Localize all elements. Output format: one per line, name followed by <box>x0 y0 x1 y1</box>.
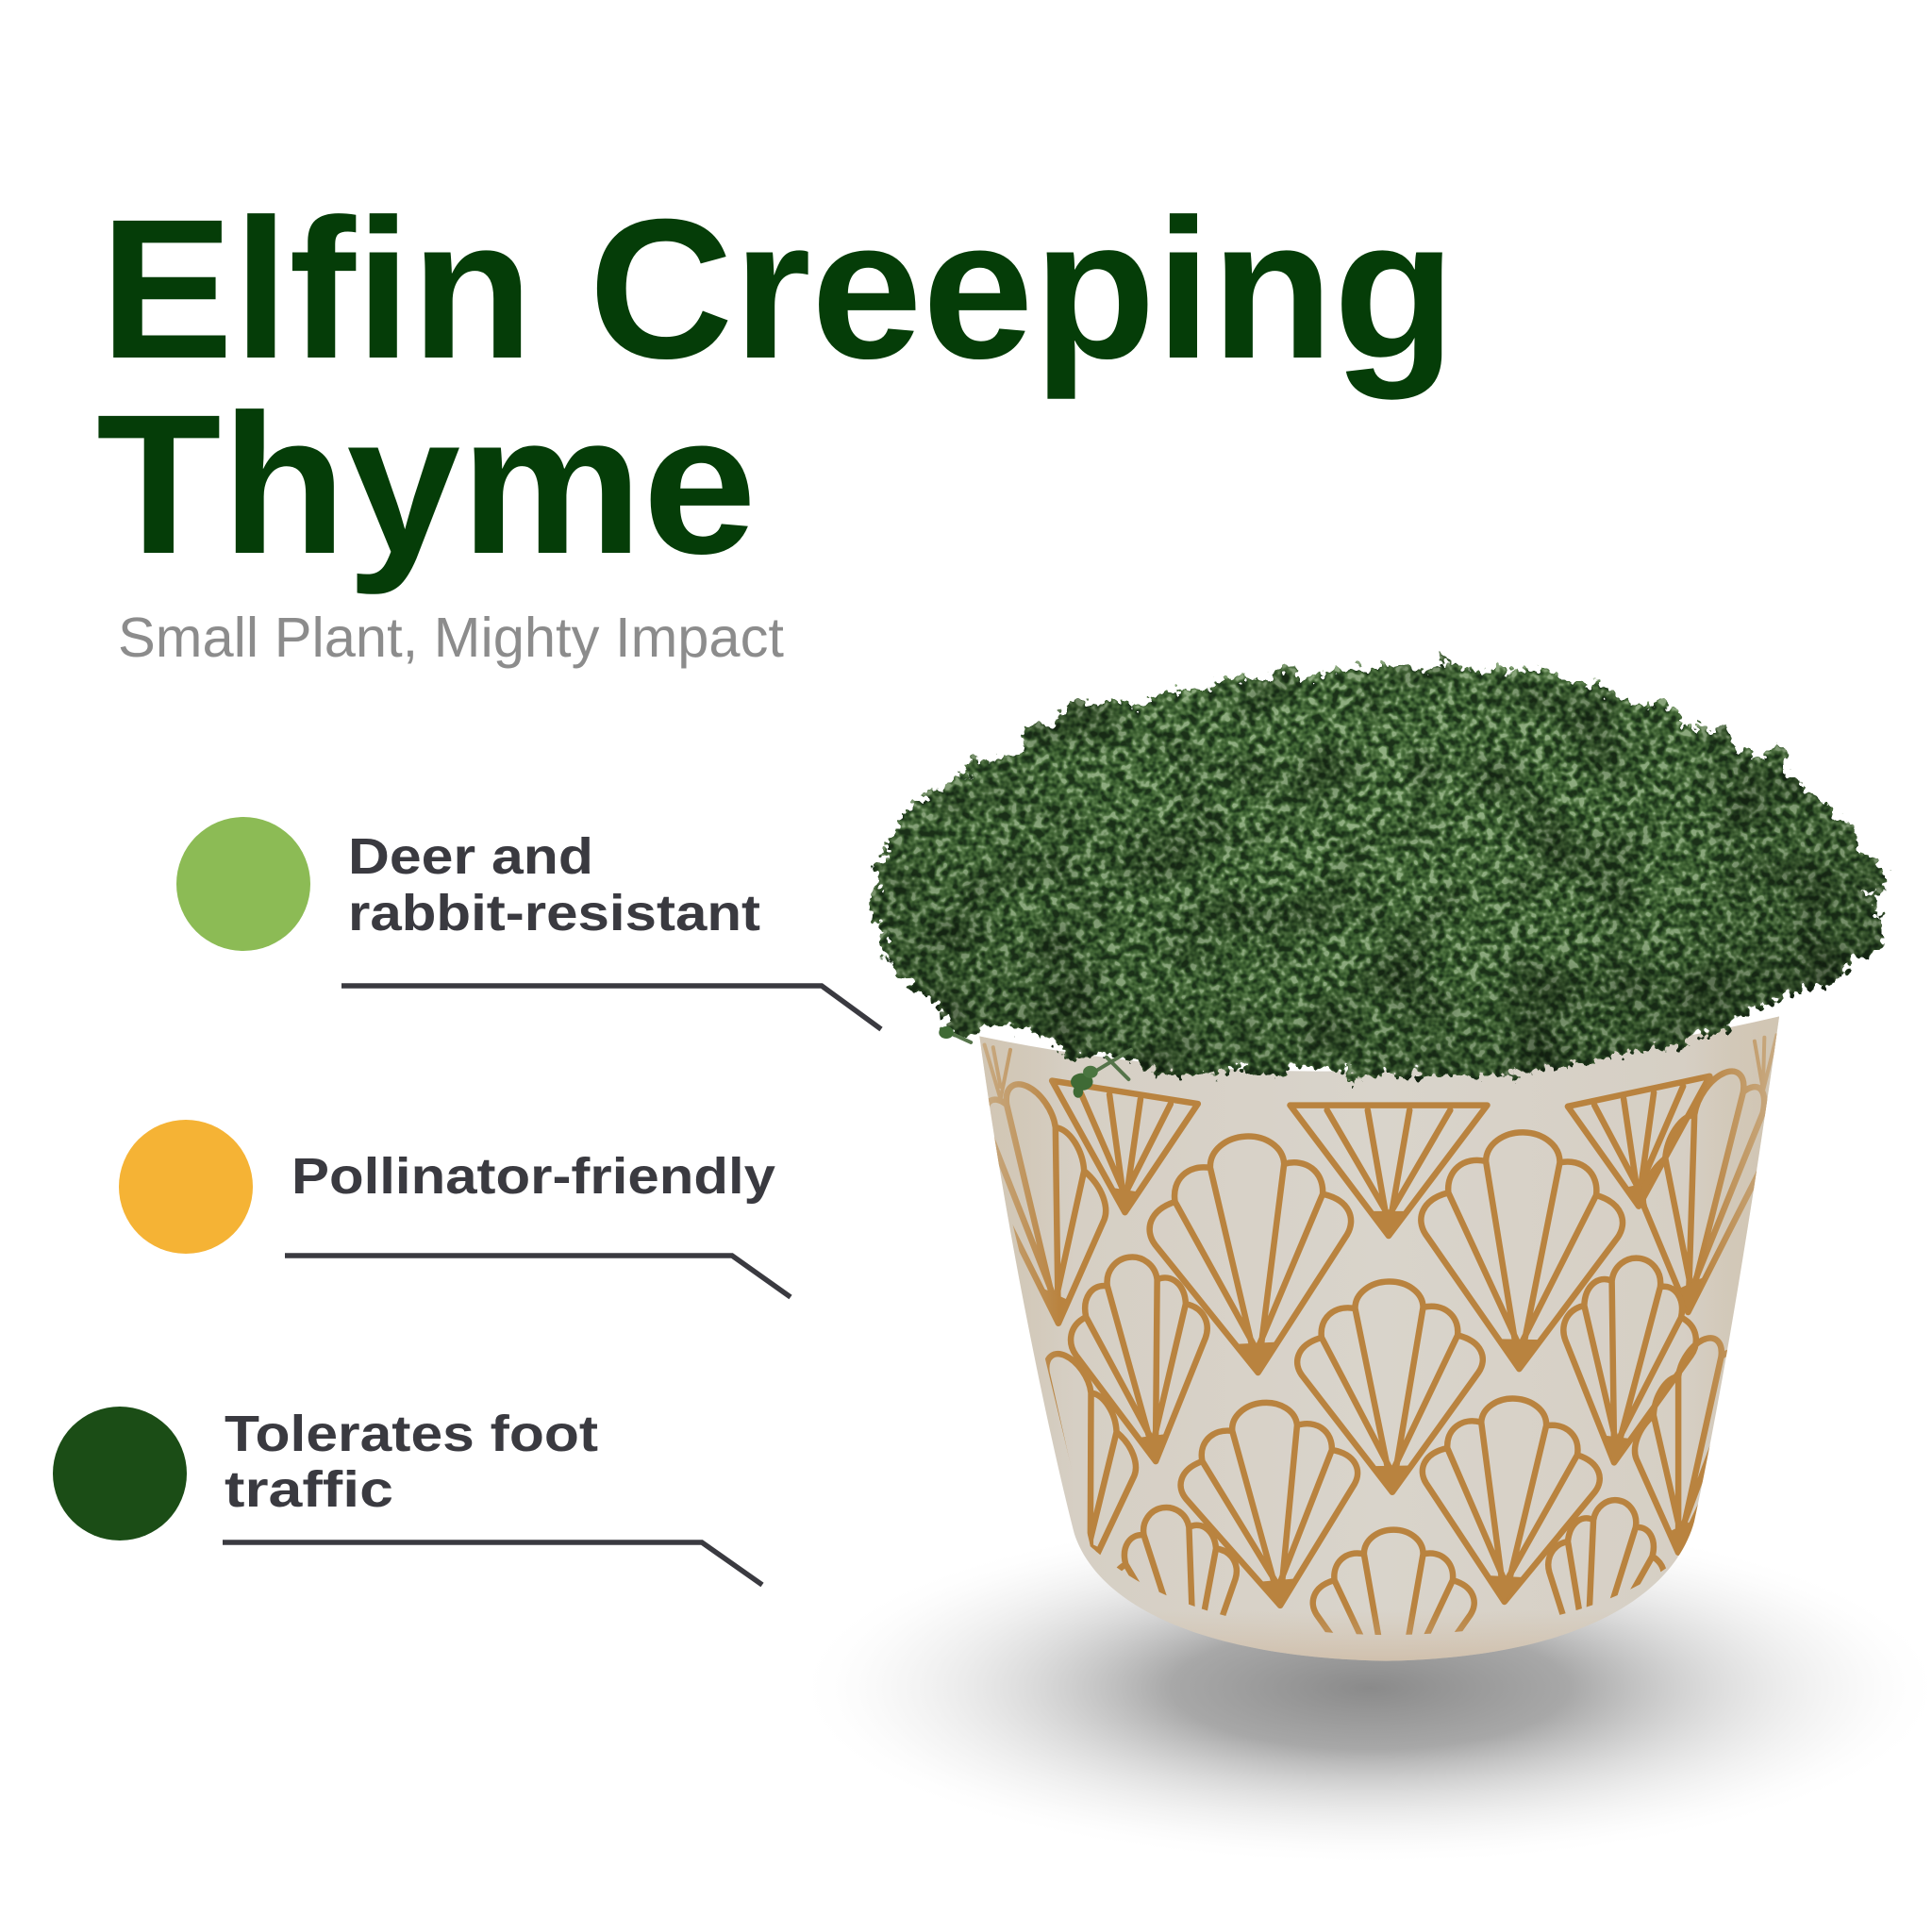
potted plant illustration <box>869 651 1891 1834</box>
feature label: Deer and <box>348 828 593 885</box>
feature: deer and rabbit resistant <box>176 817 881 1029</box>
leader line <box>341 986 881 1029</box>
leader line <box>223 1542 762 1585</box>
feature: tolerates foot traffic <box>53 1406 762 1585</box>
feature label: traffic <box>225 1461 393 1518</box>
feature label <box>225 1406 598 1518</box>
trailing sprig <box>939 1026 1131 1098</box>
feature label: Pollinator-friendly <box>291 1148 775 1205</box>
light green dot <box>176 817 310 951</box>
feature label: rabbit-resistant <box>348 885 760 941</box>
feature: pollinator friendly <box>119 1120 791 1297</box>
subtitle: Small Plant, Mighty Impact <box>118 607 784 669</box>
feature label: Tolerates foot <box>225 1406 598 1462</box>
title line 1: Elfin Creeping <box>100 177 1456 400</box>
thyme foliage mound <box>868 664 1880 1075</box>
gold shell pattern <box>983 1033 1777 1636</box>
title line 2: Thyme <box>96 373 757 595</box>
feature label <box>348 828 760 941</box>
ground shadow <box>804 1513 1932 1863</box>
leader line <box>285 1256 791 1297</box>
title <box>96 177 1456 595</box>
orange dot <box>119 1120 253 1254</box>
dark green dot <box>53 1407 187 1541</box>
ceramic pot <box>979 1017 1779 1661</box>
